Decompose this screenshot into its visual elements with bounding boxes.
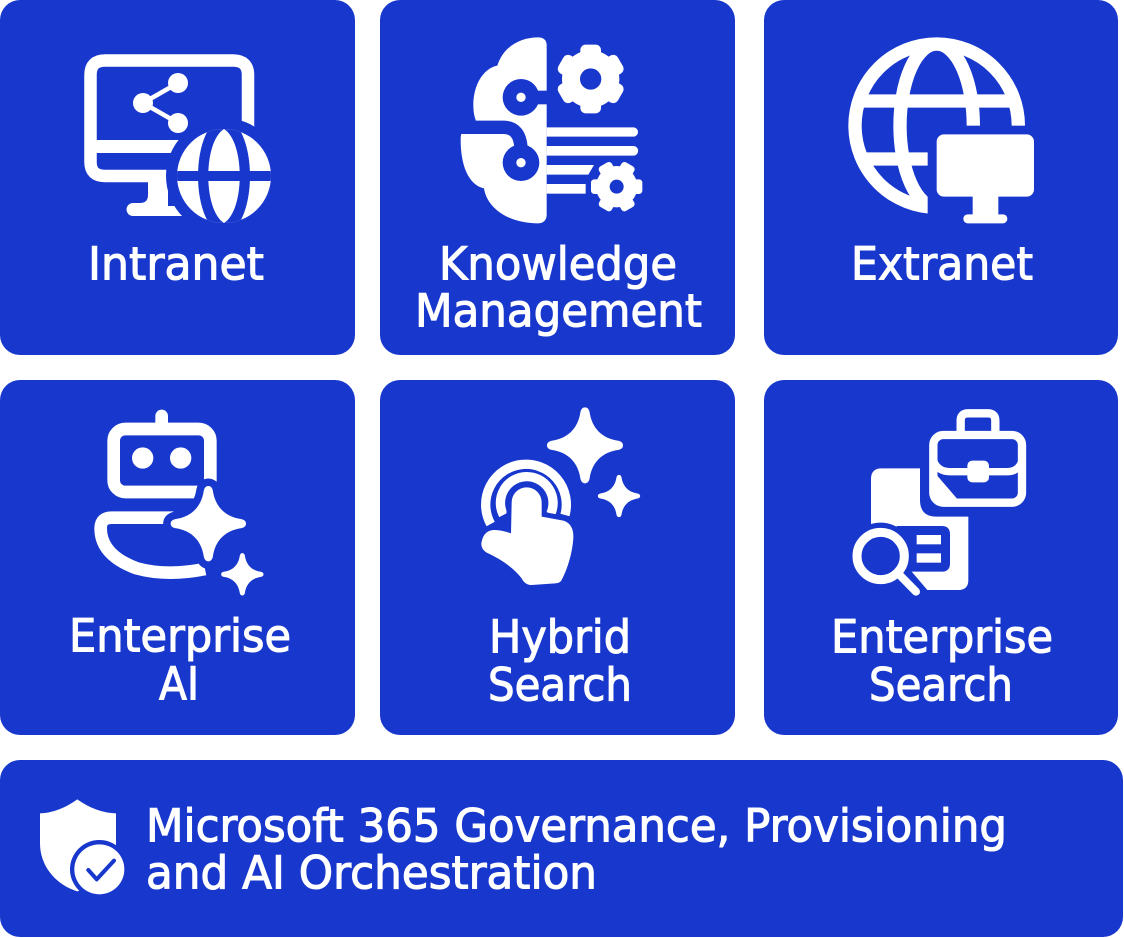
icon: monitor with share symbol and globe bbox=[90, 60, 282, 234]
heading: Knowledge Management bbox=[415, 238, 702, 338]
text: governance statement bbox=[146, 800, 1007, 900]
heading: Enterprise Search: Enterprise bbox=[831, 610, 1053, 664]
heading: Knowledge Management: Management bbox=[415, 284, 702, 338]
icon: robot with sparkles bbox=[101, 416, 263, 595]
panel: hybrid search bbox=[380, 380, 735, 735]
panel: enterprise AI bbox=[0, 380, 355, 735]
panel: intranet bbox=[0, 0, 355, 355]
panel: knowledge management bbox=[380, 0, 735, 355]
text: governance statement: and AI Orchestration bbox=[146, 846, 597, 900]
icon: shield with check bbox=[40, 799, 129, 899]
icon: globe with monitor bbox=[855, 44, 1051, 232]
heading: Knowledge Management: Knowledge bbox=[439, 238, 677, 290]
heading: Enterprise AI: AI bbox=[159, 658, 199, 710]
icon: tapping hand with sparkles bbox=[481, 407, 640, 585]
heading: Hybrid Search: Hybrid bbox=[489, 610, 631, 664]
heading: Intranet: Intranet bbox=[88, 238, 264, 290]
panel: extranet bbox=[764, 0, 1118, 355]
heading: Hybrid Search: Search bbox=[488, 658, 632, 712]
text: governance statement: Microsoft 365 Governance, Provisioning bbox=[146, 800, 1007, 852]
heading: Enterprise AI bbox=[69, 610, 291, 710]
heading: Enterprise AI: Enterprise bbox=[69, 610, 291, 662]
panel: Microsoft 365 governance bbox=[0, 760, 1123, 937]
heading: Hybrid Search bbox=[488, 610, 632, 712]
icon: document, magnifier and briefcase bbox=[847, 413, 1022, 592]
icon: brain with gears bbox=[458, 37, 642, 223]
heading: Extranet: Extranet bbox=[851, 238, 1033, 290]
heading: Enterprise Search bbox=[831, 610, 1053, 712]
heading: Enterprise Search: Search bbox=[869, 658, 1013, 712]
panel: enterprise search bbox=[764, 380, 1118, 735]
